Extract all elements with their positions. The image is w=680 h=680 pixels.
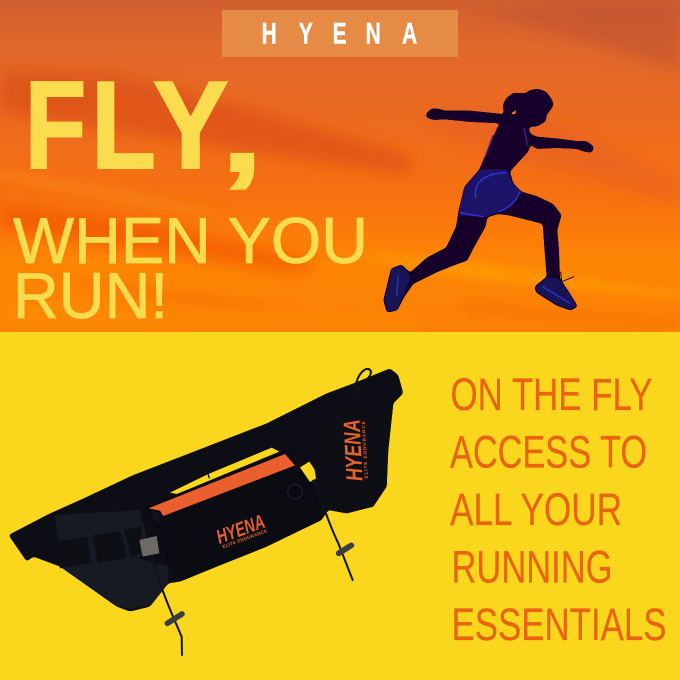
grey buckle tab — [139, 536, 159, 557]
tagline: on the fly access: RUNNING — [452, 542, 612, 593]
belt mesh panel — [55, 510, 168, 609]
square cut-out — [300, 462, 319, 482]
back shoe — [385, 266, 411, 311]
cords and toggles — [153, 369, 371, 655]
slit bridge — [207, 472, 209, 478]
headline: WHEN YOU: WHEN YOU — [13, 204, 368, 277]
tagline: on the fly access — [450, 369, 666, 650]
side pouch — [307, 393, 393, 513]
headline: FLY,: L — [91, 57, 156, 195]
tagline: on the fly access: ALL YOUR — [450, 484, 622, 535]
headline: FLY,: F — [25, 57, 86, 195]
front logo — [214, 511, 268, 550]
hair gap — [511, 110, 516, 114]
front logo: HYENA — [214, 511, 268, 549]
front shoe — [536, 277, 577, 309]
front pocket — [147, 450, 322, 582]
pouch logo: ELITE ENDURANCE — [361, 421, 369, 479]
headline: RUN!: RUN! — [13, 259, 168, 332]
product: running belt — [8, 368, 403, 655]
headline: FLY, — [25, 57, 263, 196]
pouch logo: HYENA — [338, 419, 368, 482]
headline: FLY,: , — [221, 68, 263, 196]
panel: sunset sky — [0, 0, 680, 332]
runner shorts — [459, 169, 522, 217]
runner silhouette — [383, 89, 594, 313]
belt body — [8, 368, 403, 612]
runner top highlight — [485, 128, 527, 157]
panel: yellow lower section — [0, 332, 680, 680]
loops — [53, 527, 142, 568]
front logo: ELITE ENDURANCE — [222, 528, 268, 549]
runner laces — [561, 272, 574, 282]
brand banner: HYENA — [262, 18, 417, 50]
headline: FLY,: Y — [153, 57, 228, 195]
brand banner — [222, 10, 458, 57]
pocket slit — [170, 448, 279, 494]
orange zipper — [148, 454, 295, 516]
